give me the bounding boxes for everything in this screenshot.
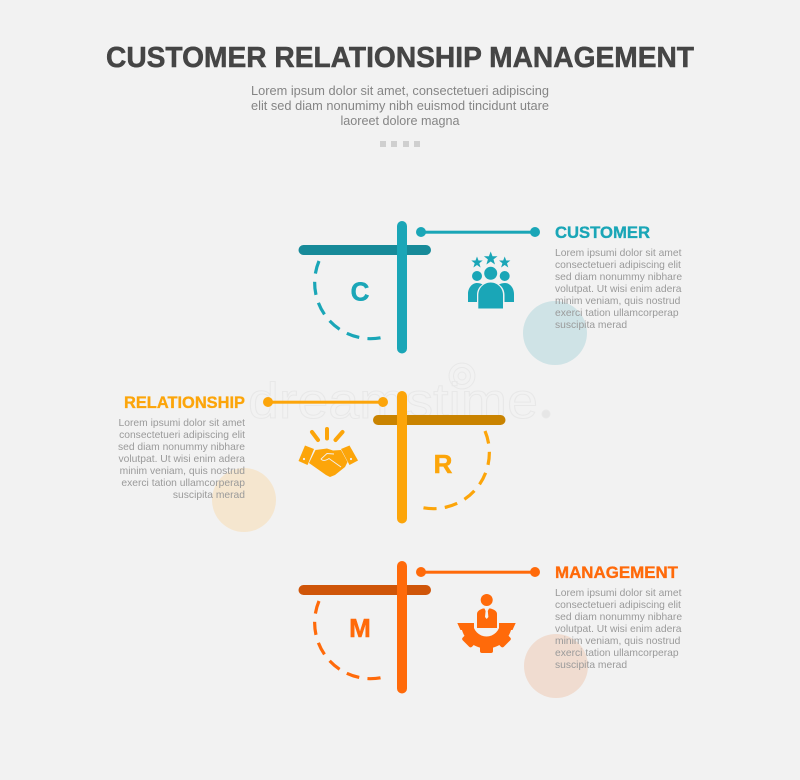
cross marker: relationship xyxy=(373,391,506,524)
body text: management: Lorem ipsumi dolor sit amet xyxy=(555,588,682,599)
title: CUSTOMER RELATIONSHIP MANAGEMENT xyxy=(106,42,694,74)
body text: customer: sed diam nonummy nibhare xyxy=(555,272,682,283)
body text: relationship xyxy=(118,418,245,501)
icon: manager in gear xyxy=(457,594,516,653)
body text: relationship: minim veniam, quis nostrud xyxy=(120,466,245,477)
letter M: M xyxy=(349,613,371,643)
body text: management: sed diam nonummy nibhare xyxy=(555,612,682,623)
icon: team with stars xyxy=(468,252,514,308)
body text: relationship: volutpat. Ut wisi enim adera xyxy=(119,454,245,465)
letter C: C xyxy=(351,276,370,306)
body text: management xyxy=(555,588,682,671)
body text: management: exerci tation ullamcorperap xyxy=(555,648,679,659)
body text: relationship: exerci tation ullamcorperap xyxy=(121,478,245,489)
body text: customer: volutpat. Ut wisi enim adera xyxy=(555,284,682,295)
letter R: R xyxy=(434,449,453,479)
body text: customer: suscipita merad xyxy=(555,320,627,331)
connector: customer xyxy=(416,227,540,237)
body text: management: suscipita merad xyxy=(555,660,627,671)
body text: relationship: Lorem ipsumi dolor sit amet xyxy=(119,418,245,429)
dashed arc: management xyxy=(315,601,382,679)
icon: handshake xyxy=(298,429,358,477)
panel: customer xyxy=(298,221,682,365)
heading: relationship: RELATIONSHIP xyxy=(124,393,245,412)
body text: management: consectetueri adipiscing elit xyxy=(555,600,681,611)
watermark: dreamstime xyxy=(248,373,538,429)
subtitle: Lorem ipsum dolor sit amet, consectetueri adipiscing xyxy=(251,83,549,98)
body text: relationship: sed diam nonummy nibhare xyxy=(118,442,245,453)
body text: customer xyxy=(555,248,682,331)
body text: customer: exerci tation ullamcorperap xyxy=(555,308,679,319)
body text: customer: minim veniam, quis nostrud xyxy=(555,296,681,307)
subtitle: elit sed diam nonumimy nibh euismod tincidunt utare xyxy=(251,98,549,113)
heading: customer: CUSTOMER xyxy=(555,223,650,242)
body text: management: volutpat. Ut wisi enim adera xyxy=(555,624,682,635)
subtitle xyxy=(251,83,549,128)
connector: relationship xyxy=(263,397,388,407)
accent circle: relationship xyxy=(212,468,276,532)
panel: relationship xyxy=(118,391,506,532)
body text: relationship: consectetueri adipiscing elit xyxy=(119,430,245,441)
dashed arc: relationship xyxy=(422,431,489,509)
body text: relationship: suscipita merad xyxy=(173,490,245,501)
heading: management: MANAGEMENT xyxy=(555,563,679,582)
accent circle: management xyxy=(524,634,588,698)
dashed arc: customer xyxy=(315,261,382,339)
body text: customer: consectetueri adipiscing elit xyxy=(555,260,681,271)
accent circle: customer xyxy=(523,301,587,365)
panel: management xyxy=(298,561,682,698)
cross marker: management xyxy=(298,561,431,694)
subtitle: laoreet dolore magna xyxy=(340,113,460,128)
cross marker: customer xyxy=(298,221,431,354)
pagination dots xyxy=(380,141,420,147)
body text: customer: Lorem ipsumi dolor sit amet xyxy=(555,248,682,259)
body text: management: minim veniam, quis nostrud xyxy=(555,636,681,647)
connector: management xyxy=(416,567,540,577)
